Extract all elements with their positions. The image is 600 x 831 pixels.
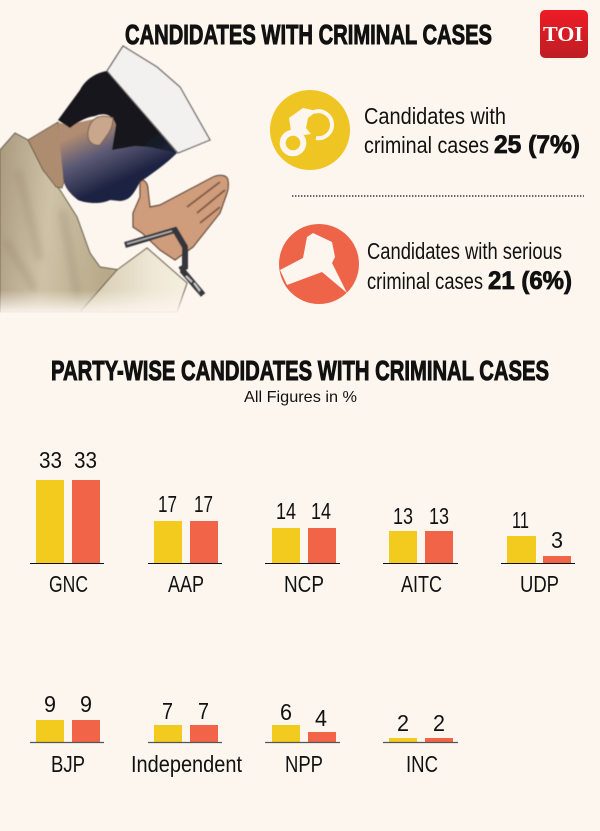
bar group: BJP: 9 — [80, 691, 92, 717]
TOI logo — [540, 10, 588, 58]
stat: candidates with serious criminal cases: criminal cases — [367, 268, 483, 294]
stat: candidates with serious criminal cases: 21 (6%) — [488, 267, 572, 295]
bar group: GNC: 33 — [74, 447, 97, 473]
bar group: INC: INC — [406, 751, 438, 777]
bar group: BJP — [30, 691, 104, 777]
bar group: AITC: 13 — [429, 503, 449, 529]
cap — [107, 46, 210, 153]
TOI logo: TOI — [543, 22, 583, 46]
bar group: NPP: 4 — [315, 705, 327, 731]
bar group: Independent: 7 — [198, 698, 209, 724]
finger lines — [187, 182, 225, 223]
bar group: BJP: 9 — [44, 691, 56, 717]
bar group: NCP: 14 — [311, 498, 331, 524]
stat: candidates with criminal cases — [364, 103, 580, 159]
icon: hand with knife — [279, 224, 359, 304]
bar group: INC: 2 — [433, 710, 445, 736]
bar group: UDP: 11 — [512, 507, 529, 533]
bar group: INC — [383, 710, 458, 777]
bar group: NPP — [265, 699, 340, 777]
bar group: NPP: 6 — [280, 699, 292, 725]
bar group: BJP: BJP — [51, 751, 85, 777]
bottom fade — [0, 290, 200, 314]
bar group: NCP — [265, 498, 340, 597]
bar group: Independent: 7 — [162, 698, 173, 724]
robe — [0, 133, 187, 312]
bar group: AAP: 17 — [194, 491, 213, 517]
bar group: AAP — [148, 491, 222, 597]
stat: candidates with criminal cases: criminal cases — [364, 132, 489, 158]
bar group: UDP: 3 — [551, 527, 563, 553]
bar group: GNC: GNC — [49, 571, 88, 597]
bar group: UDP — [501, 507, 575, 597]
bar group: AITC: 13 — [393, 503, 413, 529]
illustration: politician with folded hands in handcuffs — [0, 46, 228, 314]
bar group: NCP: 14 — [276, 498, 296, 524]
bar group: Independent: Independent — [131, 751, 243, 777]
stat: candidates with criminal cases: Candidates with — [364, 103, 506, 129]
bar group: INC: 2 — [397, 710, 409, 736]
bar group: Independent — [131, 698, 243, 777]
neck — [28, 122, 66, 188]
bar group: NPP: NPP — [285, 751, 323, 777]
bar group: GNC — [30, 447, 104, 597]
icon: handcuffs — [270, 90, 350, 170]
bar group: NCP: NCP — [284, 571, 324, 597]
robe folds — [5, 170, 78, 300]
head and face — [58, 117, 177, 203]
folded hands — [133, 175, 228, 260]
handcuff — [125, 230, 203, 295]
subtitle: All Figures in % — [244, 389, 357, 406]
stat: candidates with serious criminal cases — [367, 238, 572, 295]
bar group: AITC — [383, 503, 458, 597]
sleeve — [80, 248, 187, 312]
bar group: AITC: AITC — [401, 571, 442, 597]
ear — [88, 116, 113, 145]
bar group: UDP: UDP — [520, 571, 559, 597]
bar group: GNC: 33 — [39, 447, 62, 473]
bar group: AAP: 17 — [158, 491, 177, 517]
stat: candidates with criminal cases: 25 (7%) — [494, 131, 580, 159]
dotted divider — [292, 195, 584, 197]
hair — [58, 71, 177, 153]
bar group: AAP: AAP — [168, 571, 204, 597]
